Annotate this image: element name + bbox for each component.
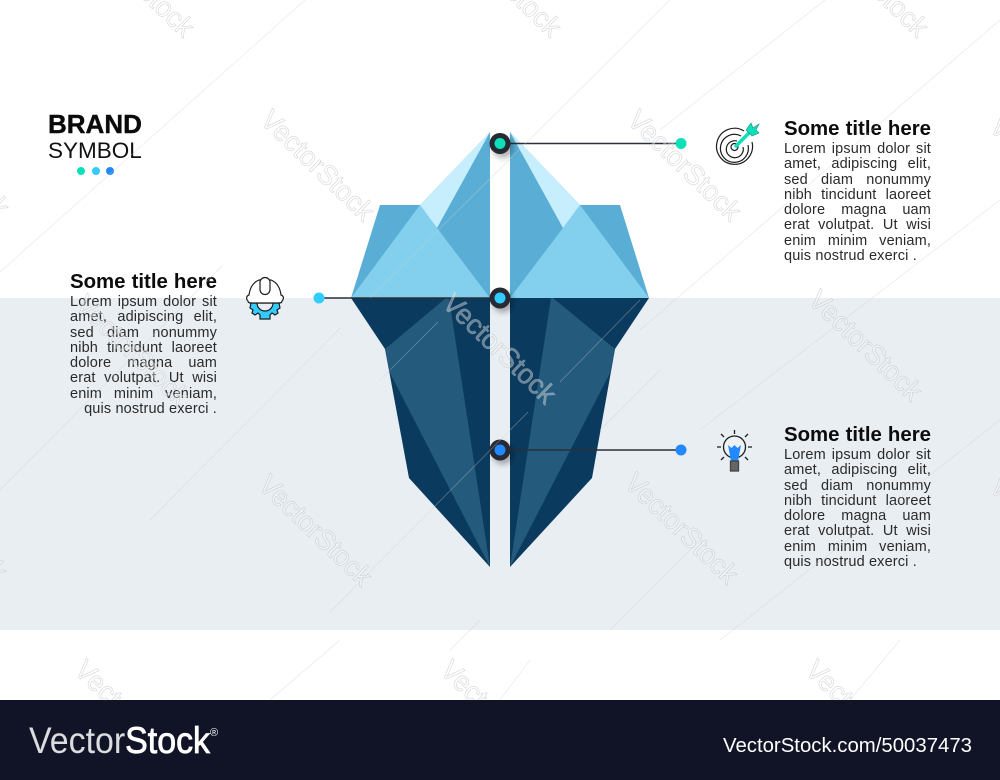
text block: left (70, 271, 217, 417)
body text: enim minim veniam, (784, 539, 931, 555)
watermark overlay: VectorStock (435, 654, 561, 778)
body text: dolore magna uam (70, 355, 217, 371)
watermark overlay: VectorStock (253, 469, 379, 593)
registered mark: ® (210, 727, 218, 739)
node: top (490, 133, 510, 154)
body text: Lorem ipsum dolor sit (70, 294, 217, 310)
connector line: middle (314, 292, 500, 304)
icon: helmet with gear (247, 278, 283, 319)
title: Some title here (784, 118, 931, 140)
body text: sed diam nonummy (784, 172, 931, 188)
icon: light bulb (717, 430, 752, 471)
connector line: bottom (500, 444, 686, 456)
watermark overlay: VectorStock (255, 104, 381, 228)
body text: quis nostrud exerci . (84, 401, 217, 417)
text block: bottom right (784, 424, 931, 570)
body text: dolore magna uam (784, 202, 931, 218)
watermark overlay: VectorStock (70, 289, 196, 413)
title: Some title here (784, 424, 931, 446)
body text: amet, adipiscing elit, (784, 156, 931, 172)
body text: quis nostrud exerci . (784, 248, 917, 264)
body text: dolore magna uam (784, 508, 931, 524)
title: Some title here (70, 271, 217, 293)
icon: target with arrow (717, 123, 759, 164)
iceberg lower right (510, 298, 649, 567)
footer logo: VectorStock (29, 720, 210, 761)
body text: amet, adipiscing elit, (784, 462, 931, 478)
iceberg lower left (351, 298, 490, 567)
body text: erat volutpat. Ut wisi (784, 523, 931, 539)
body text: amet, adipiscing elit, (70, 309, 217, 325)
footer bar (0, 700, 1000, 780)
body text: enim minim veniam, (784, 233, 931, 249)
connector line: top (500, 138, 686, 149)
body text: nibh tincidunt laoreet (70, 340, 217, 356)
symbol word: SYMBOL (48, 138, 142, 163)
watermark overlay: VectorStock (437, 287, 563, 411)
body text: Lorem ipsum dolor sit (784, 447, 931, 463)
body text: sed diam nonummy (784, 478, 931, 494)
body text: enim minim veniam, (70, 386, 217, 402)
body text: quis nostrud exerci . (784, 554, 917, 570)
body text (70, 294, 217, 417)
footer image id: VectorStock.com/50037473 (723, 735, 972, 757)
brand word: BRAND (48, 109, 142, 139)
body text: nibh tincidunt laoreet (784, 187, 931, 203)
iceberg upper right (510, 132, 649, 298)
body text (784, 447, 931, 570)
body text (784, 141, 931, 264)
watermark overlay: VectorStock (69, 654, 195, 778)
body text: erat volutpat. Ut wisi (70, 370, 217, 386)
body text: Lorem ipsum dolor sit (784, 141, 931, 157)
watermark overlay: VectorStock (803, 284, 929, 408)
body text: sed diam nonummy (70, 325, 217, 341)
body text: nibh tincidunt laoreet (784, 493, 931, 509)
text block: top right (784, 118, 931, 264)
brand dots (77, 167, 114, 175)
body text: erat volutpat. Ut wisi (784, 217, 931, 233)
node: middle (490, 288, 510, 308)
watermark overlay: VectorStock (622, 104, 748, 228)
iceberg upper left (351, 132, 490, 298)
background band (0, 298, 1000, 630)
node: bottom (490, 440, 510, 460)
brand logo (48, 109, 142, 175)
watermark overlay: VectorStock (800, 654, 926, 778)
iceberg (351, 132, 649, 567)
watermark overlay: VectorStock (619, 467, 745, 591)
